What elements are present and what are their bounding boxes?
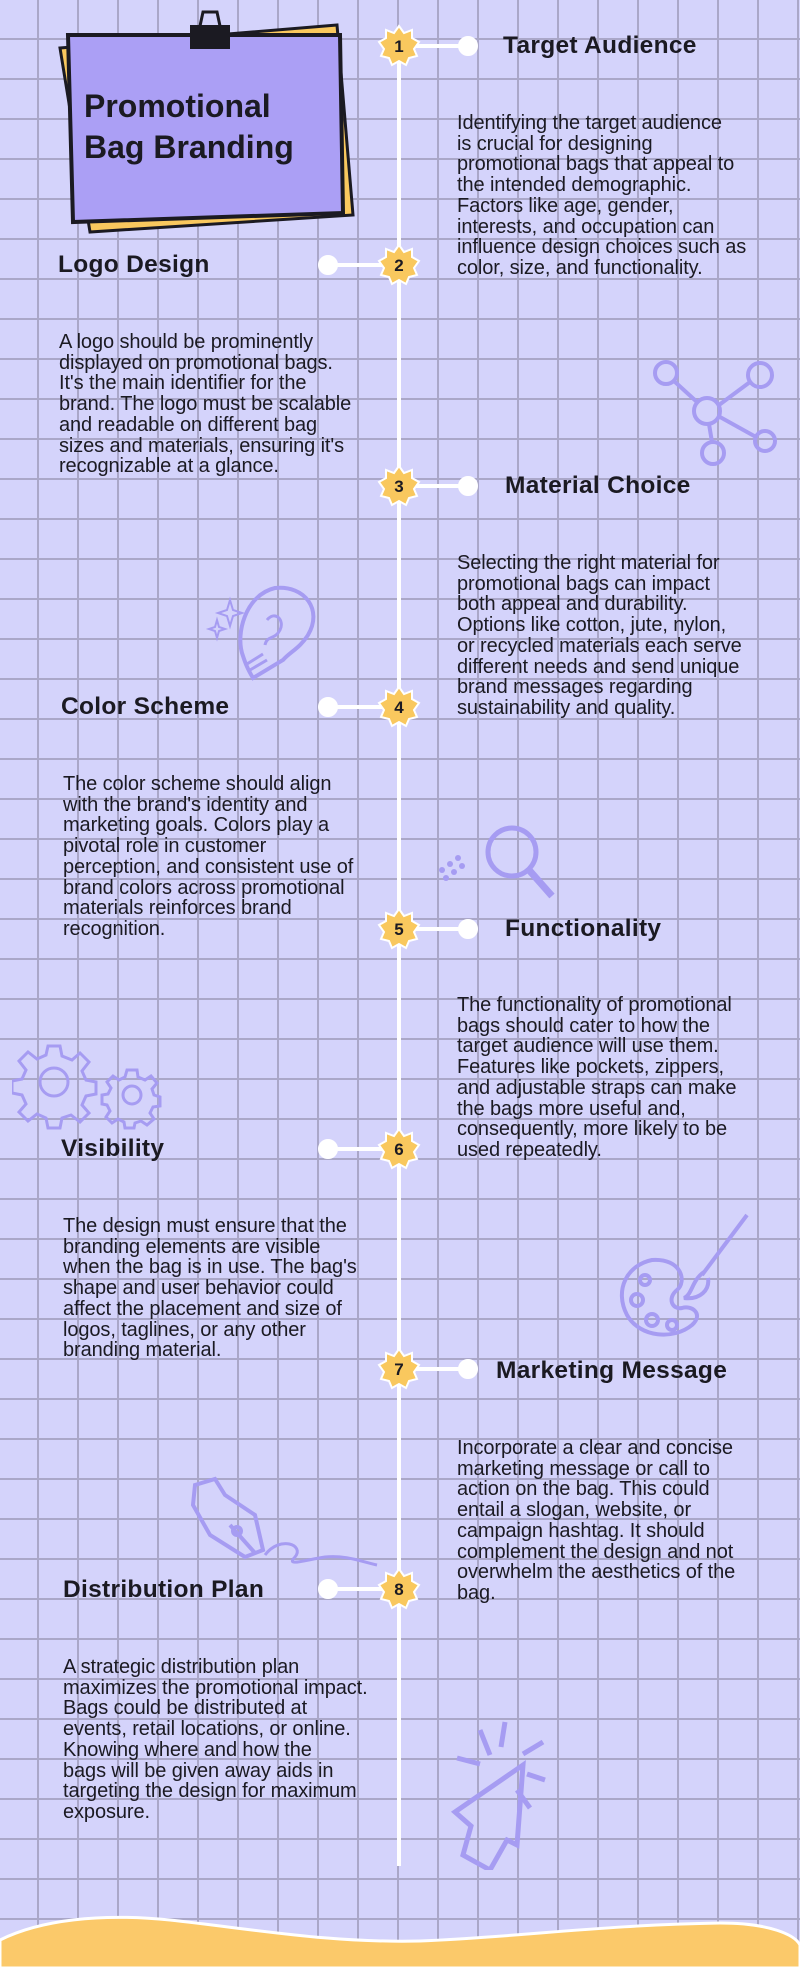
text 7: overwhelm the aesthetics of the	[457, 1561, 735, 1583]
badges: 1	[394, 37, 404, 56]
text 3	[457, 552, 742, 719]
text 6	[63, 1215, 357, 1361]
badges: 4	[394, 698, 404, 717]
section 6: Visibility	[61, 1135, 164, 1162]
text 5: and adjustable straps can make	[457, 1077, 736, 1099]
connectors	[320, 38, 476, 1597]
text 6: The design must ensure that the	[63, 1215, 347, 1237]
text 4: The color scheme should align	[63, 773, 331, 795]
text 7: Incorporate a clear and concise	[457, 1437, 733, 1459]
text 6: branding elements are visible	[63, 1236, 320, 1258]
text 2: recognizable at a glance.	[59, 455, 279, 477]
text 4: recognition.	[63, 918, 165, 940]
text 4: marketing goals. Colors play a	[63, 814, 329, 836]
text 3: Options like cotton, jute, nylon,	[457, 614, 726, 636]
text 8	[63, 1656, 368, 1823]
text 6: shape and user behavior could	[63, 1277, 334, 1299]
icon: molecule	[653, 360, 777, 466]
text 8: A strategic distribution plan	[63, 1656, 299, 1678]
text 4: materials reinforces brand	[63, 897, 292, 919]
text 4: pivotal role in customer	[63, 835, 266, 857]
badges: 2	[394, 256, 404, 275]
text 8: bags will be given away aids in	[63, 1760, 333, 1782]
text 6: branding material.	[63, 1339, 221, 1361]
text 3: different needs and send unique	[457, 656, 739, 678]
text 1: promotional bags that appeal to	[457, 153, 734, 175]
badges: 6	[394, 1140, 404, 1159]
text 8: maximizes the promotional impact.	[63, 1677, 368, 1699]
icon: magnifier	[439, 826, 554, 898]
text 2: A logo should be prominently	[59, 331, 313, 353]
title note	[58, 10, 355, 234]
text 4: with the brand's identity and	[63, 794, 307, 816]
text 1: is crucial for designing	[457, 133, 652, 155]
text 3: brand messages regarding	[457, 676, 693, 698]
text 2: It's the main identifier for the	[59, 372, 306, 394]
text 8: exposure.	[63, 1801, 150, 1823]
text 1: Factors like age, gender,	[457, 195, 674, 217]
text 3: Selecting the right material for	[457, 552, 719, 574]
text 3: both appeal and durability.	[457, 593, 687, 615]
text 2: and readable on different bag	[59, 414, 317, 436]
text 5: consequently, more likely to be	[457, 1118, 727, 1140]
icon: palette	[620, 1214, 748, 1337]
text 1	[457, 112, 746, 279]
text 5: target audience will use them.	[457, 1035, 719, 1057]
text 3: promotional bags can impact	[457, 573, 710, 595]
text 1: interests, and occupation can	[457, 216, 714, 238]
text 7: complement the design and not	[457, 1541, 733, 1563]
text 2: brand. The logo must be scalable	[59, 393, 351, 415]
section 3: Material Choice	[505, 472, 691, 499]
text 7	[457, 1437, 735, 1604]
section 8: Distribution Plan	[63, 1576, 264, 1603]
icon: fountain pen	[191, 1476, 378, 1566]
text 5: The functionality of promotional	[457, 994, 732, 1016]
text 6: affect the placement and size of	[63, 1298, 342, 1320]
text 1: color, size, and functionality.	[457, 257, 703, 279]
text 8: events, retail locations, or online.	[63, 1718, 351, 1740]
section 4: Color Scheme	[61, 693, 229, 720]
text 6: logos, taglines, or any other	[63, 1319, 306, 1341]
text 8: Knowing where and how the	[63, 1739, 312, 1761]
section 7: Marketing Message	[496, 1357, 727, 1384]
text 5: used repeatedly.	[457, 1139, 602, 1161]
section 5: Functionality	[505, 915, 661, 942]
badges: 3	[394, 477, 404, 496]
title: Promotional	[84, 88, 271, 124]
text 8: Bags could be distributed at	[63, 1697, 307, 1719]
text 1: influence design choices such as	[457, 236, 746, 258]
text 5: bags should cater to how the	[457, 1015, 710, 1037]
text 2: displayed on promotional bags.	[59, 352, 333, 374]
text 5: Features like pockets, zippers,	[457, 1056, 724, 1078]
text 3: sustainability and quality.	[457, 697, 675, 719]
text 4: brand colors across promotional	[63, 877, 344, 899]
icon: cursor click	[451, 1722, 546, 1870]
text 7: bag.	[457, 1582, 496, 1604]
text 7: marketing message or call to	[457, 1458, 710, 1480]
footer wave	[0, 1916, 800, 1968]
badges: 7	[394, 1360, 404, 1379]
text 7: campaign hashtag. It should	[457, 1520, 704, 1542]
text 2: sizes and materials, ensuring it's	[59, 435, 344, 457]
text 7: entail a slogan, website, or	[457, 1499, 691, 1521]
text 7: action on the bag. This could	[457, 1478, 709, 1500]
badges: 5	[394, 920, 404, 939]
text 2	[59, 331, 351, 477]
section 1: Target Audience	[503, 32, 697, 59]
text 1: Identifying the target audience	[457, 112, 722, 134]
text 1: the intended demographic.	[457, 174, 691, 196]
title: Bag Branding	[84, 129, 294, 165]
badges: 8	[394, 1580, 404, 1599]
text 4: perception, and consistent use of	[63, 856, 353, 878]
text 8: targeting the design for maximum	[63, 1780, 357, 1802]
section 2: Logo Design	[58, 251, 210, 278]
text 5: the bags more useful and,	[457, 1098, 686, 1120]
icon: gears	[12, 1044, 162, 1130]
icon: light bulb	[206, 586, 316, 681]
text 5	[457, 994, 736, 1161]
text 4	[63, 773, 354, 940]
title	[84, 88, 294, 165]
text 3: or recycled materials each serve	[457, 635, 742, 657]
text 6: when the bag is in use. The bag's	[63, 1256, 357, 1278]
